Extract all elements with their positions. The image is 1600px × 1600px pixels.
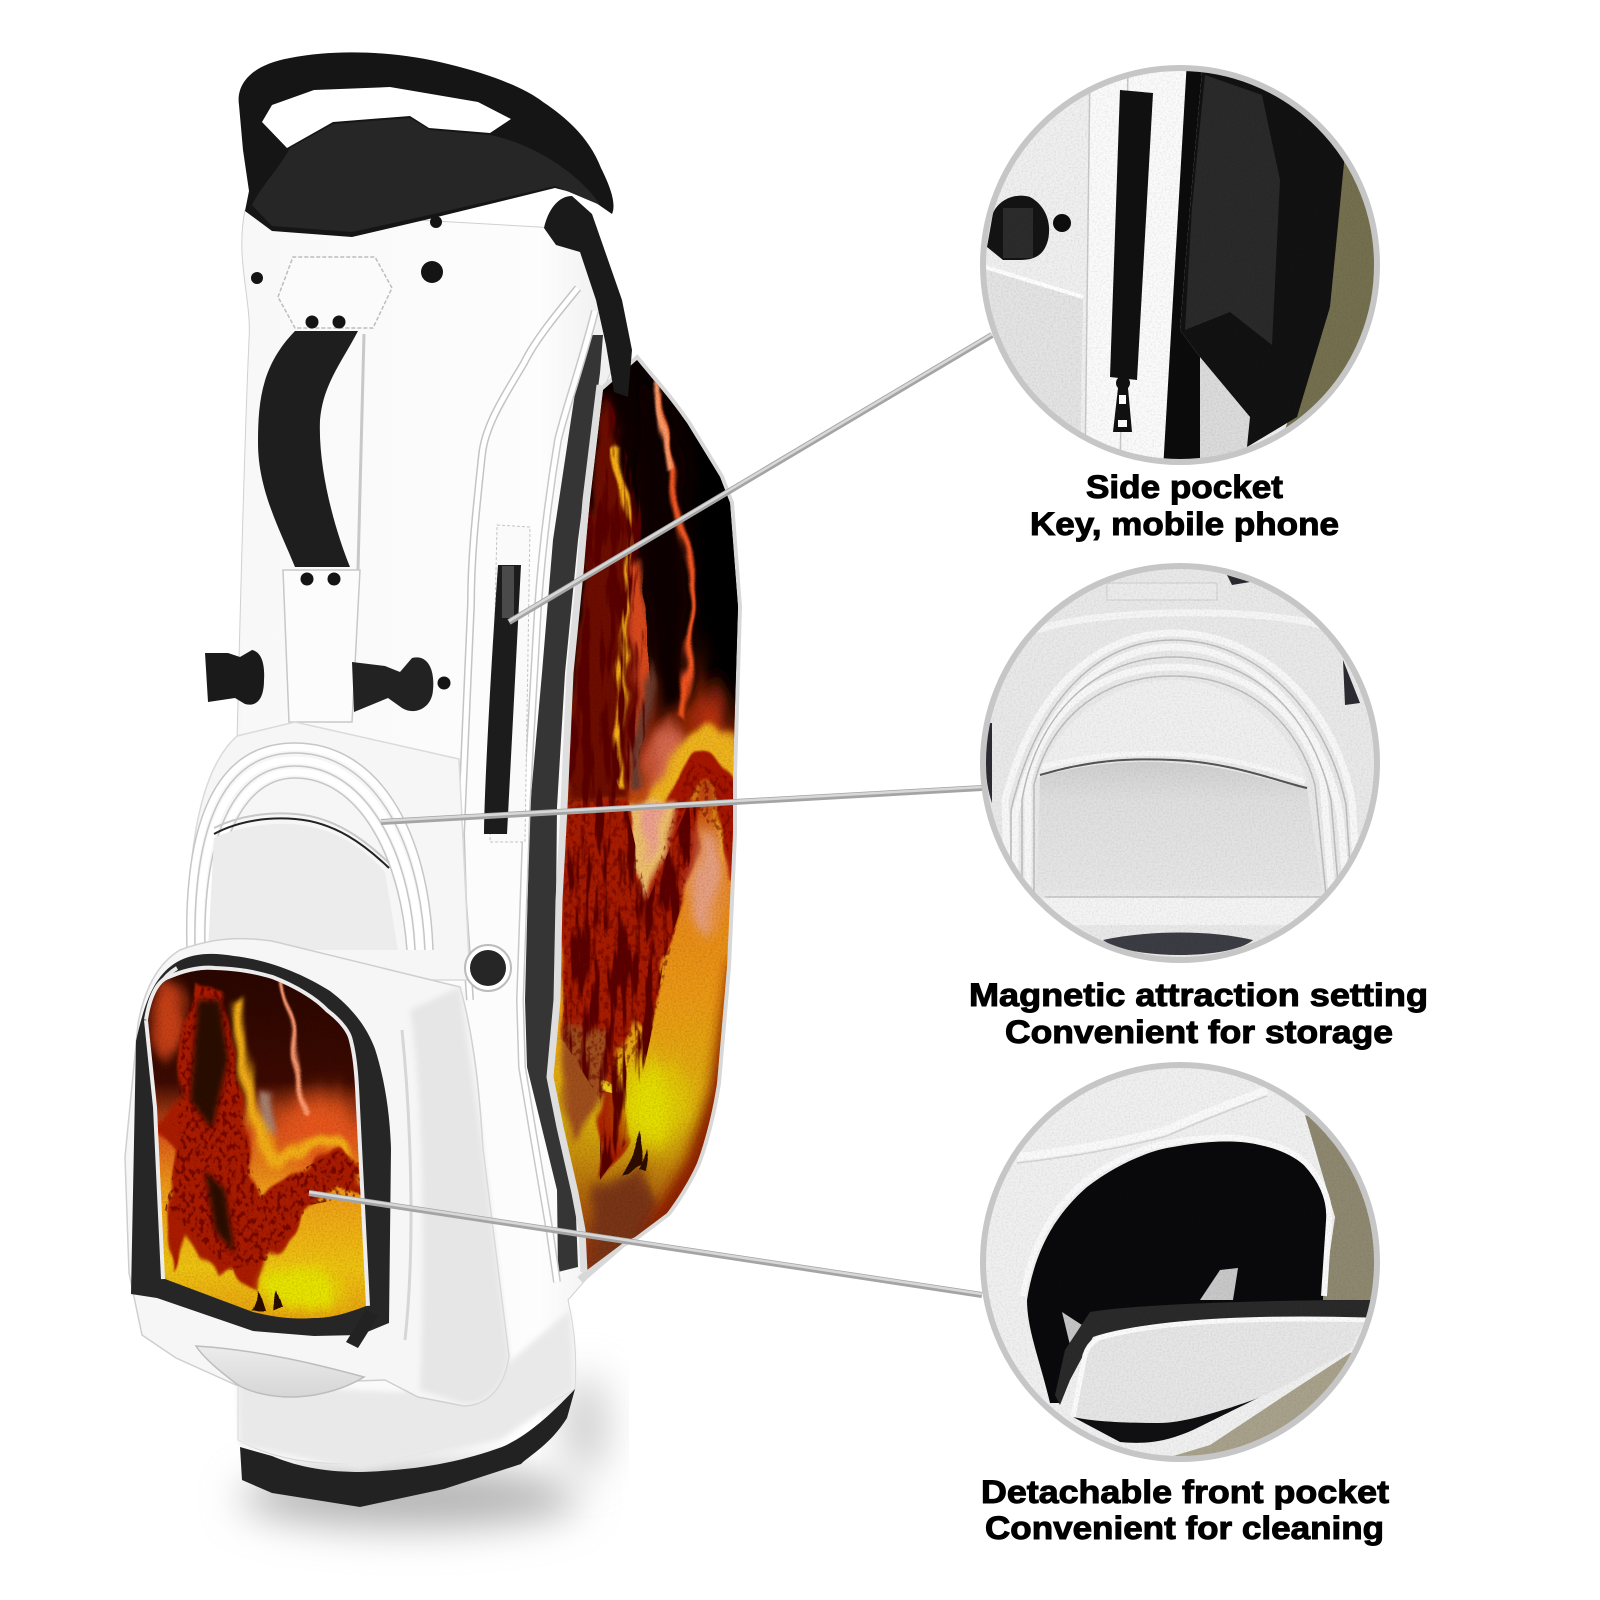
callout line: detachable pocket (309, 1192, 982, 1295)
front pocket zipper band (131, 954, 391, 1336)
hexagon patch (278, 257, 392, 328)
lower strap panel stitch line (358, 334, 364, 570)
rivets (251, 216, 450, 690)
golf bag product (125, 52, 760, 1507)
front pocket body (125, 939, 509, 1406)
detail circle: side pocket (980, 60, 1400, 470)
side print panel (554, 354, 742, 1282)
caption: side pocket: Key, mobile phone (1030, 506, 1339, 542)
dark streaks over the creature (563, 385, 700, 1180)
right buckle (352, 657, 433, 712)
rubber base (240, 1389, 575, 1507)
magnetic button (465, 945, 511, 991)
ground shadow (240, 1375, 607, 1528)
carry handle and mesh top (239, 52, 614, 237)
side seam piping (461, 288, 595, 1282)
black grip handle (258, 331, 358, 567)
caption: magnetic attraction (969, 977, 1428, 1050)
strap panel (283, 570, 360, 722)
callout line: magnetic pocket (381, 787, 982, 822)
top strap buckle (544, 196, 632, 397)
caption: magnetic attraction: Magnetic attraction setting (969, 977, 1428, 1013)
detail circle: magnetic attraction (980, 563, 1380, 963)
bottom flap (196, 1346, 364, 1397)
detail circle: detachable pocket (980, 1062, 1400, 1470)
callout line: side pocket (509, 334, 992, 622)
caption: side pocket: Side pocket (1086, 469, 1283, 505)
main bag body (200, 210, 625, 1463)
black zip stripe (525, 335, 603, 1272)
caption: detachable pocket (981, 1474, 1389, 1546)
caption: detachable pocket: Detachable front pocket (981, 1474, 1389, 1510)
side pocket zipper (484, 525, 530, 842)
zipper pull (346, 1310, 378, 1348)
caption: detachable pocket: Convenient for cleaning (985, 1510, 1384, 1546)
caption: side pocket (1030, 469, 1339, 542)
front print panel (140, 960, 375, 1330)
caption: magnetic attraction: Convenient for storage (1005, 1014, 1393, 1050)
magnetic pocket (187, 722, 470, 980)
white piping beside stripe (550, 385, 600, 1272)
left buckle (205, 650, 264, 705)
lower body shading (238, 1310, 575, 1470)
